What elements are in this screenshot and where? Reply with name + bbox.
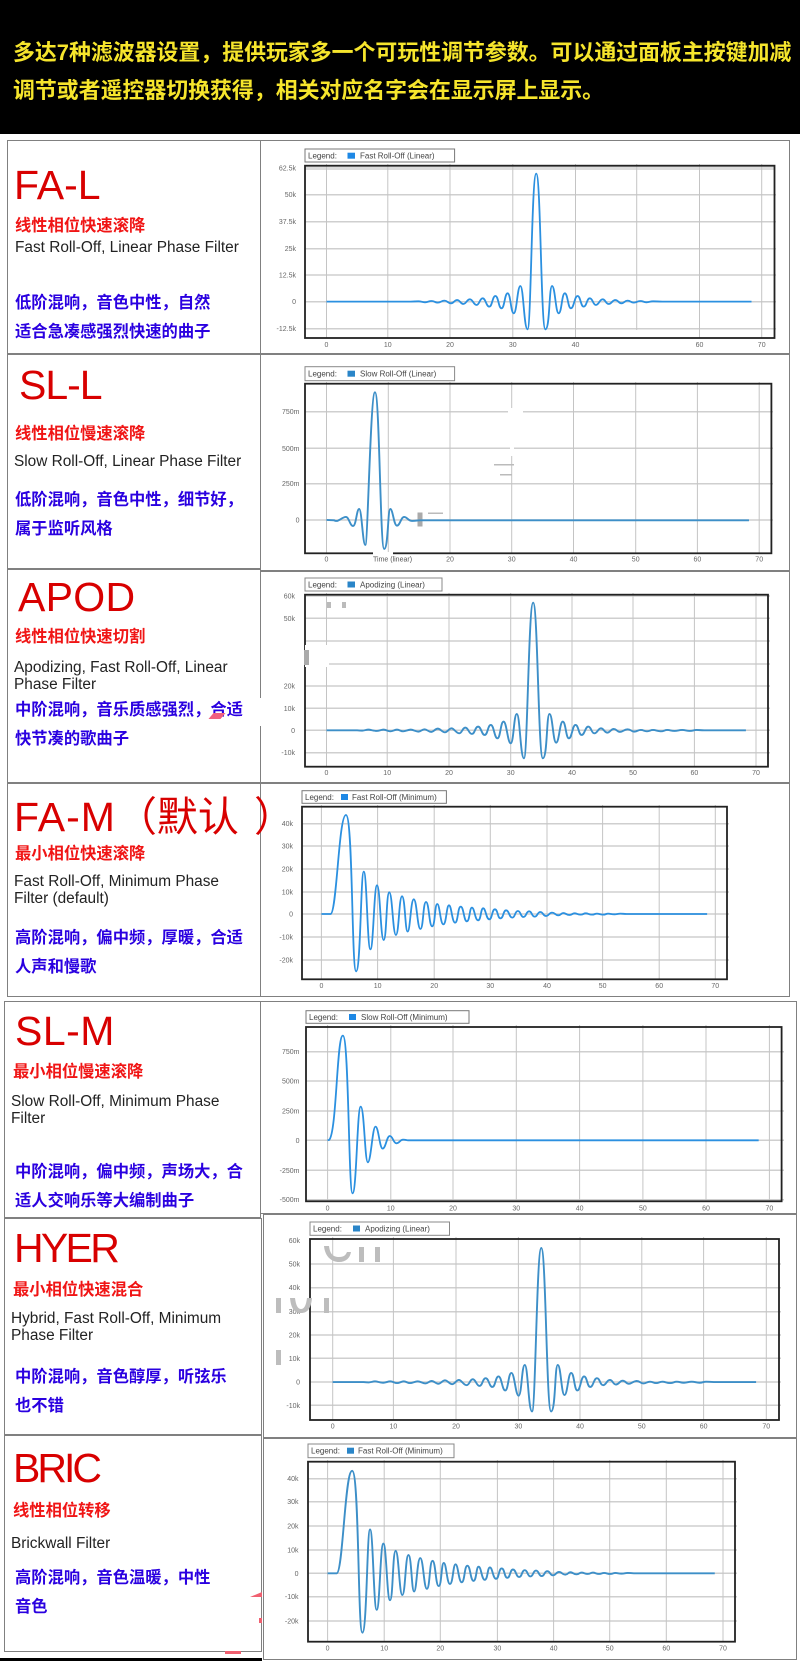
x axis labels: 20 — [446, 342, 454, 349]
legend: Legend: — [313, 1224, 342, 1234]
y axis labels: -20k — [285, 1618, 299, 1626]
x axis labels: 30 — [512, 1206, 520, 1212]
red smudge on column edge — [259, 1618, 262, 1623]
legend: Legend: — [309, 1013, 338, 1022]
impulse response curve — [321, 815, 707, 971]
sound description: 适人交响乐等大编制曲子 — [15, 1186, 194, 1210]
panel: HYER chart — [263, 1214, 797, 1438]
y axis labels: -20k — [279, 958, 293, 964]
sound description — [15, 1564, 210, 1616]
legend — [310, 1222, 450, 1235]
y axis labels: 750m — [282, 1049, 300, 1056]
x axis labels: 40 — [550, 1646, 558, 1652]
x axis labels: 60 — [702, 1206, 710, 1212]
header banner — [0, 0, 800, 134]
sound description: 适合急凑感强烈快速的曲子 — [15, 318, 210, 342]
y axis labels: 50k — [289, 1262, 300, 1268]
sound description — [15, 288, 210, 342]
legend: Apodizing (Linear) — [360, 580, 425, 590]
sound description — [15, 696, 243, 748]
legend: Legend: — [308, 580, 337, 590]
x axis labels: 70 — [758, 342, 766, 349]
x axis labels: 70 — [719, 1646, 727, 1652]
y axis labels: -10k — [285, 1594, 299, 1601]
sound description — [15, 486, 243, 538]
sound description — [15, 924, 243, 976]
x axis labels — [326, 1646, 727, 1652]
x axis labels: 40 — [543, 983, 551, 990]
sound description: 中阶混响，音乐质感强烈，合适 — [15, 696, 243, 720]
x axis labels: 10 — [374, 983, 382, 990]
x axis labels: 20 — [445, 770, 453, 777]
y axis labels: -250m — [280, 1168, 300, 1175]
x axis labels — [325, 770, 760, 777]
y axis labels: 30k — [282, 844, 293, 850]
legend: Legend: — [311, 1447, 340, 1456]
x axis labels: 30 — [509, 342, 517, 349]
legend: Apodizing (Linear) — [365, 1224, 430, 1234]
y axis labels: 0 — [291, 728, 295, 735]
image artefacts: Time (linear) — [373, 556, 412, 564]
y axis labels: 50k — [285, 192, 296, 199]
x axis labels: 10 — [387, 1206, 395, 1212]
image artefacts — [373, 408, 523, 564]
english filter type: Phase Filter — [11, 1327, 93, 1344]
x axis labels: 0 — [319, 983, 323, 990]
x axis labels: 40 — [570, 556, 577, 564]
legend — [305, 578, 442, 591]
red smudge at bottom — [225, 1651, 241, 1654]
y axis labels: 10k — [287, 1548, 299, 1554]
impulse response curve — [327, 174, 752, 329]
x axis labels: 20 — [446, 556, 454, 564]
legend: Fast Roll-Off (Minimum) — [352, 793, 437, 802]
filter name: SL-L — [19, 362, 102, 408]
y axis labels: 60k — [284, 594, 295, 600]
legend — [305, 149, 455, 162]
x axis labels: 0 — [331, 1424, 335, 1430]
chinese filter type: 线性相位快速切割 — [15, 623, 145, 647]
header text line 2: 调节或者遥控器切换获得，相关对应名字会在显示屏上显示。 — [13, 78, 604, 103]
y axis labels: 250m — [282, 481, 300, 488]
x axis labels: 40 — [568, 770, 576, 777]
x axis labels: 10 — [383, 770, 391, 777]
english filter type — [11, 1093, 219, 1127]
panel: FA-L chart — [260, 140, 790, 354]
y axis labels: 10k — [284, 706, 295, 713]
y axis labels: 30k — [289, 1309, 300, 1316]
x axis labels: 70 — [766, 1206, 773, 1212]
x axis labels: 40 — [572, 342, 579, 349]
x axis labels: 70 — [762, 1424, 770, 1430]
y axis labels: 25k — [285, 246, 296, 253]
impulse response curve — [328, 1471, 715, 1633]
y axis labels — [279, 821, 293, 964]
x axis labels: 10 — [384, 342, 392, 349]
panel: APOD chart — [260, 571, 790, 783]
legend: Fast Roll-Off (Linear) — [360, 152, 435, 160]
y axis labels: 20k — [287, 1524, 299, 1530]
y axis labels: 0 — [292, 299, 296, 306]
y axis labels: 40k — [282, 821, 293, 828]
x axis labels: 0 — [326, 1206, 330, 1212]
x axis labels: 10 — [380, 1646, 388, 1652]
x axis labels — [326, 1206, 773, 1212]
panel: SL-L description — [7, 354, 261, 569]
impulse response curve — [327, 603, 746, 758]
x axis labels: 50 — [639, 1206, 647, 1212]
y axis labels: -10k — [286, 1403, 300, 1410]
filter name: FA-M（默认 ） — [14, 783, 295, 843]
x axis labels: 50 — [632, 556, 640, 564]
y axis labels: 500m — [282, 1078, 300, 1086]
english filter type: Apodizing, Fast Roll-Off, Linear Phase Filter — [14, 659, 228, 693]
x axis labels: 60 — [662, 1646, 670, 1652]
x axis labels: 0 — [325, 556, 329, 564]
x axis labels: 70 — [755, 556, 763, 564]
x axis labels — [331, 1424, 770, 1430]
english filter type: Slow Roll-Off, Minimum Phase — [11, 1093, 219, 1110]
y axis labels: 750m — [282, 409, 300, 416]
legend: Slow Roll-Off (Minimum) — [361, 1013, 448, 1022]
x axis labels: 20 — [452, 1424, 460, 1430]
legend: Slow Roll-Off (Linear) — [360, 370, 437, 379]
y axis labels: 30k — [287, 1499, 299, 1506]
panel: HYER description — [4, 1218, 262, 1435]
y axis labels: 0 — [296, 1138, 300, 1145]
y axis labels: 20k — [284, 684, 295, 690]
x axis labels: 50 — [629, 770, 637, 777]
pink smudge — [208, 713, 226, 719]
chinese filter type: 线性相位转移 — [13, 1497, 111, 1521]
gray watermark fragments — [276, 1246, 380, 1365]
chinese filter type: 线性相位快速滚降 — [15, 212, 145, 236]
y axis labels: 20k — [289, 1332, 300, 1340]
red smudge — [250, 1592, 262, 1597]
legend — [302, 791, 446, 803]
x axis labels: 60 — [700, 1424, 708, 1430]
y axis labels — [285, 1476, 299, 1626]
x axis labels: 0 — [326, 1646, 330, 1652]
sound description: 人声和慢歌 — [15, 952, 96, 976]
sound description: 高阶混响，音色温暖，中性 — [15, 1564, 210, 1588]
sound description: 中阶混响，偏中频，声场大，合 — [15, 1158, 243, 1182]
x axis labels: 40 — [576, 1424, 584, 1430]
filter name: SL-M — [15, 1008, 115, 1054]
panel: FA-M description — [7, 783, 261, 997]
filter name: FA-L — [14, 162, 101, 208]
filter name: APOD — [18, 574, 135, 620]
panel: SL-M chart — [260, 1001, 797, 1214]
y axis labels: 500m — [282, 446, 300, 453]
black strip at bottom left — [0, 1658, 262, 1661]
y axis labels: 0 — [296, 1380, 300, 1386]
sound description: 属于监听风格 — [15, 514, 113, 538]
x axis labels: 0 — [325, 770, 329, 777]
filter name: BRIC — [13, 1445, 99, 1491]
panel: BRIC chart — [263, 1438, 797, 1660]
english filter type: Slow Roll-Off, Linear Phase Filter — [14, 453, 241, 470]
y axis labels: -12.5k — [277, 326, 296, 333]
x axis labels: 70 — [752, 770, 760, 777]
panel: SL-L chart — [260, 354, 790, 571]
sound description: 低阶混响，音色中性，自然 — [15, 288, 210, 312]
y axis labels: -500m — [280, 1197, 300, 1204]
y axis labels: 10k — [289, 1356, 300, 1363]
chinese filter type: 线性相位慢速滚降 — [15, 420, 145, 444]
english filter type: Fast Roll-Off, Minimum Phase — [14, 873, 219, 890]
image artefacts — [304, 602, 357, 667]
legend — [305, 367, 455, 381]
y axis labels: 62.5k — [279, 166, 296, 172]
y axis labels: 12.5k — [279, 272, 296, 280]
english filter type — [14, 873, 219, 907]
chinese filter type: 最小相位快速混合 — [13, 1276, 143, 1300]
sound description — [15, 1362, 227, 1416]
sound description: 音色 — [15, 1592, 48, 1616]
x axis labels: 20 — [449, 1206, 457, 1212]
x axis labels: 50 — [638, 1424, 646, 1430]
y axis labels: -10k — [281, 750, 295, 757]
y axis labels: 20k — [282, 866, 293, 874]
english filter type: Filter — [11, 1110, 45, 1127]
panel: BRIC description — [4, 1435, 262, 1652]
english filter type: Hybrid, Fast Roll-Off, Minimum — [11, 1310, 221, 1327]
x axis labels: 50 — [599, 983, 607, 990]
x axis labels: 60 — [696, 342, 703, 349]
sound description: 也不错 — [15, 1392, 64, 1416]
panel: SL-M description — [4, 1001, 261, 1218]
gap in column line — [258, 698, 263, 726]
english filter type — [11, 1310, 221, 1344]
y axis labels — [277, 166, 296, 333]
sound description: 快节凑的歌曲子 — [15, 724, 129, 748]
legend: Fast Roll-Off (Minimum) — [358, 1447, 443, 1456]
header text line 1: 多达7种滤波器设置，提供玩家多一个可玩性调节参数。可以通过面板主按键加减 — [13, 40, 791, 65]
y axis labels: 37.5k — [279, 219, 296, 226]
y axis labels: 10k — [282, 890, 293, 896]
y axis labels: 0 — [289, 912, 293, 918]
english filter type: Filter (default) — [14, 890, 109, 907]
y axis labels: 40k — [287, 1476, 299, 1483]
x axis labels: 70 — [711, 983, 719, 990]
impulse response curve — [327, 392, 749, 549]
x axis labels — [325, 556, 763, 564]
y axis labels: 60k — [289, 1238, 300, 1245]
legend — [306, 1011, 469, 1023]
y axis labels: 40k — [289, 1285, 300, 1292]
sound description: 中阶混响，音色醇厚，听弦乐 — [15, 1362, 227, 1386]
english filter type: Fast Roll-Off, Linear Phase Filter — [15, 239, 239, 256]
panel: FA-M chart — [260, 783, 790, 997]
x axis labels: 60 — [694, 556, 701, 564]
panel: FA-L description — [7, 140, 261, 354]
impulse response curve — [333, 1248, 756, 1411]
sound description: 低阶混响，音色中性，细节好， — [15, 486, 243, 510]
x axis labels: 20 — [436, 1646, 444, 1652]
x axis labels: 40 — [576, 1206, 584, 1212]
y axis labels: 0 — [295, 1571, 299, 1578]
y axis labels: 250m — [282, 1108, 300, 1116]
x axis labels: 60 — [691, 770, 698, 777]
legend: Legend: — [308, 152, 337, 160]
x axis labels: 30 — [486, 983, 494, 990]
sound description: 高阶混响，偏中频，厚暖，合适 — [15, 924, 243, 948]
chinese filter type: 最小相位快速滚降 — [15, 840, 145, 864]
x axis labels: 30 — [508, 556, 516, 564]
x axis labels — [319, 983, 719, 990]
chinese filter type: 最小相位慢速滚降 — [13, 1058, 143, 1082]
x axis labels: 50 — [606, 1646, 614, 1652]
x axis labels: 0 — [325, 342, 329, 349]
x axis labels — [325, 342, 766, 349]
y axis labels: 0 — [296, 518, 300, 524]
sound description — [15, 1158, 243, 1210]
filter name: HYER — [14, 1225, 117, 1271]
y axis labels — [281, 594, 295, 757]
impulse response curve — [328, 1036, 759, 1193]
english filter type: Brickwall Filter — [11, 1535, 110, 1552]
y axis labels — [280, 1049, 300, 1204]
panel: APOD description — [7, 569, 261, 783]
legend: Legend: — [308, 370, 337, 379]
x axis labels: 30 — [507, 770, 515, 777]
legend: Legend: — [305, 793, 334, 802]
x axis labels: 20 — [430, 983, 438, 990]
x axis labels: 60 — [655, 983, 663, 990]
y axis labels — [286, 1238, 300, 1410]
x axis labels: 30 — [515, 1424, 522, 1430]
y axis labels — [282, 409, 300, 524]
legend — [308, 1444, 454, 1458]
x axis labels: 10 — [390, 1424, 397, 1430]
y axis labels: 50k — [284, 616, 295, 623]
x axis labels: 30 — [494, 1646, 501, 1652]
y axis labels: -10k — [279, 934, 293, 942]
